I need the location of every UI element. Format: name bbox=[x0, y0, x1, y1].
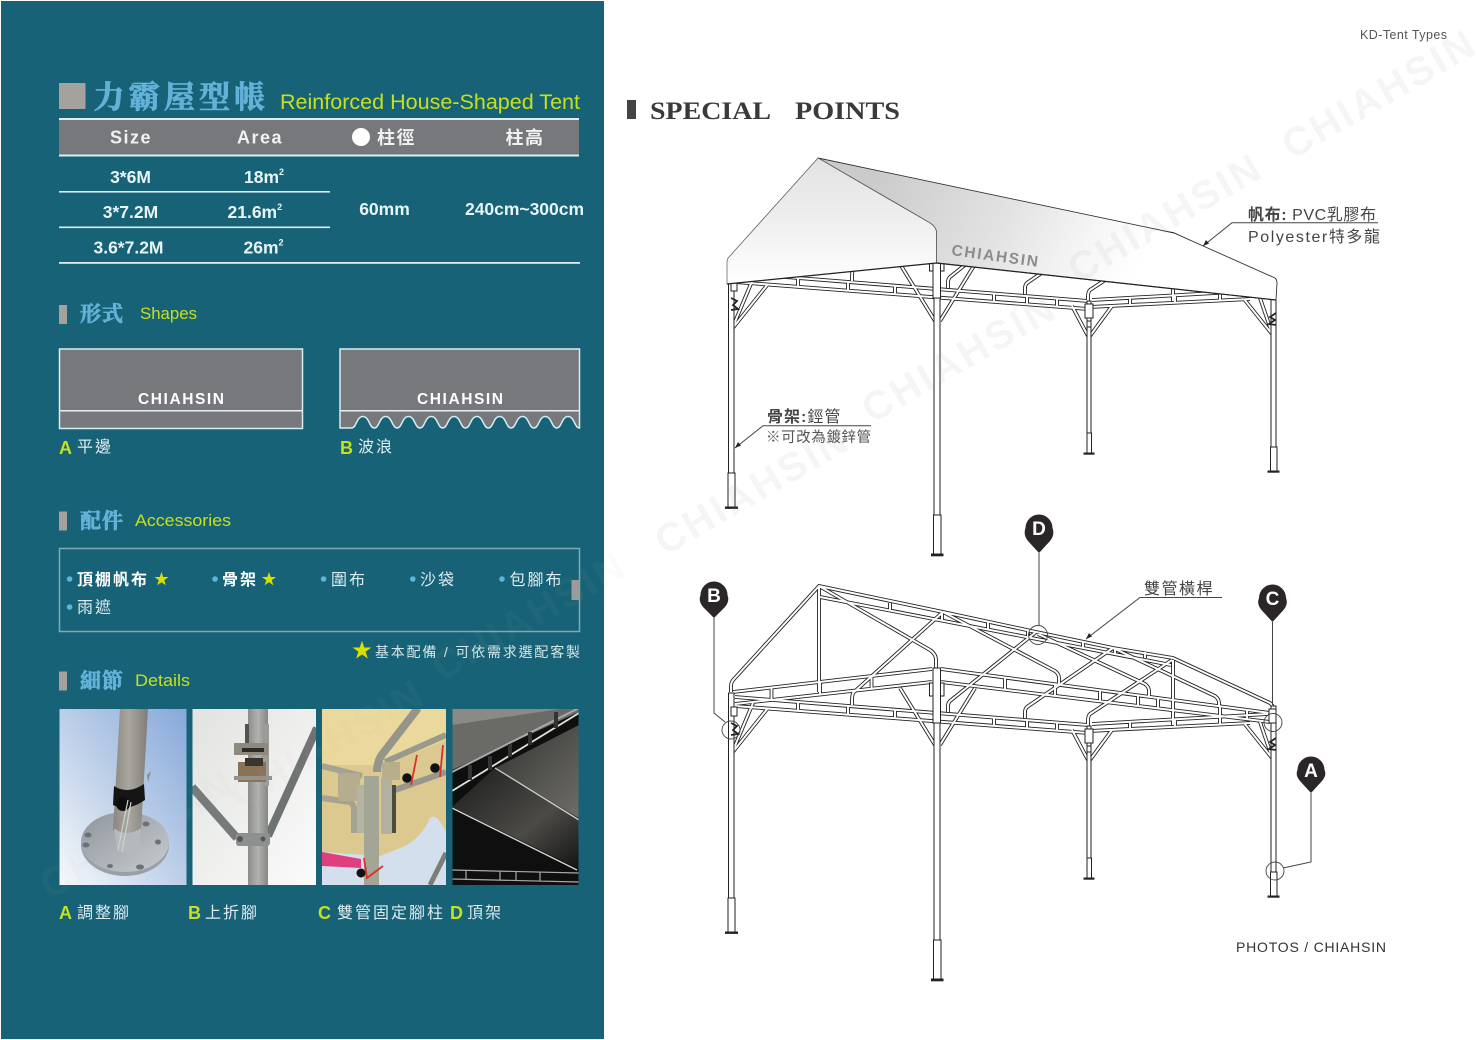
callout: canvas material bbox=[1203, 205, 1381, 246]
accessories list box: ★ bbox=[154, 571, 169, 588]
callout: double tube crossbar: 雙管橫桿 bbox=[1144, 579, 1214, 598]
callout: canvas material: 帆布: PVC乳膠布 bbox=[1248, 205, 1377, 224]
accessories list box: 雨遮 bbox=[77, 598, 113, 616]
watermark: diagonal brand: CHIAHSIN bbox=[1060, 145, 1271, 292]
detail captions: C bbox=[318, 903, 331, 923]
detail captions: A bbox=[59, 903, 72, 923]
title: product name bbox=[59, 80, 580, 115]
page tag: KD-Tent Types bbox=[1360, 28, 1447, 42]
photo B: folding joint bbox=[192, 709, 316, 885]
detail captions: 調整腳 bbox=[77, 904, 131, 922]
heading: details bbox=[59, 669, 190, 693]
table: size specifications: 21.6m bbox=[228, 202, 277, 222]
callout: frame material: 骨架:鋞管 bbox=[767, 407, 841, 426]
callout: double tube crossbar bbox=[1086, 579, 1222, 639]
detail captions: 頂架 bbox=[467, 904, 503, 922]
table: size specifications bbox=[59, 118, 584, 264]
pin D bbox=[1025, 514, 1053, 644]
watermark: diagonal brand: CHIAHSIN bbox=[32, 761, 243, 908]
table: size specifications: Size bbox=[110, 128, 152, 148]
detail captions: B bbox=[188, 903, 201, 923]
table: size specifications: 3.6*7.2M bbox=[93, 238, 164, 258]
table: size specifications: 2 bbox=[277, 202, 282, 212]
shape B: wavy edge bbox=[340, 349, 580, 458]
accessories list box bbox=[60, 548, 580, 632]
heading: special points: SPECIAL bbox=[650, 98, 771, 125]
pin C bbox=[1258, 584, 1287, 732]
canvas: front gable bbox=[727, 158, 936, 284]
pin D: D bbox=[1032, 519, 1046, 540]
diagram: bare tent frame bbox=[726, 586, 1279, 981]
table: size specifications: 60mm bbox=[359, 199, 410, 219]
panel: teal product sheet bbox=[1, 1, 604, 1039]
photo A: adjustable foot bbox=[60, 709, 186, 885]
table: size specifications: 26m bbox=[244, 238, 279, 258]
pin C: C bbox=[1266, 589, 1280, 610]
table: size specifications: 2 bbox=[279, 167, 284, 177]
table: size specifications: Area bbox=[237, 128, 283, 148]
table: size specifications: 18m bbox=[244, 167, 279, 187]
heading: shapes: 形式 bbox=[80, 302, 124, 326]
pin A bbox=[1266, 756, 1325, 880]
pin A: A bbox=[1304, 761, 1318, 782]
accessories list box: ★ bbox=[262, 571, 277, 588]
watermark: diagonal brand: CHIAHSIN bbox=[222, 671, 433, 818]
accessories list box: 圍布 bbox=[331, 571, 367, 589]
heading: special points: POINTS bbox=[795, 98, 900, 125]
heading: accessories bbox=[59, 509, 231, 533]
accessories list box: 骨架 bbox=[222, 571, 258, 589]
photo credit: PHOTOS / CHIAHSIN bbox=[1236, 939, 1386, 955]
canvas: roof long side bbox=[818, 158, 1277, 300]
title: product name: 力霸屋型帳 bbox=[94, 80, 270, 115]
shape A: flat edge: CHIAHSIN bbox=[138, 391, 224, 408]
canvas: bottom hem line bbox=[727, 263, 1276, 300]
watermark: diagonal brand: CHIAHSIN bbox=[424, 543, 635, 690]
note: standard equipment: ★ bbox=[352, 640, 372, 662]
table: size specifications: 2 bbox=[279, 238, 284, 248]
table: size specifications: 3*7.2M bbox=[103, 202, 158, 222]
photo D: roof frame underside bbox=[452, 709, 578, 885]
detail captions: 雙管固定腳柱 bbox=[337, 903, 445, 922]
callout: frame material bbox=[735, 407, 871, 448]
canvas brand: CHIAHSIN bbox=[950, 242, 1039, 271]
table: size specifications: 3*6M bbox=[110, 167, 151, 187]
callout: canvas material: Polyester特多龍 bbox=[1248, 228, 1381, 246]
photo C: double tube post bbox=[322, 709, 446, 885]
shape A: flat edge: 平邊 bbox=[77, 438, 113, 456]
title: product name: Reinforced House-Shaped Tent bbox=[280, 91, 580, 114]
accessories list box: 包腳布 bbox=[510, 571, 564, 589]
heading: accessories: 配件 bbox=[80, 509, 124, 533]
table: size specifications: 240cm~300cm bbox=[465, 199, 584, 219]
pin B bbox=[700, 582, 740, 739]
accessories list box: 沙袋 bbox=[420, 571, 456, 589]
note: standard equipment: 基本配備 / 可依需求選配客製 bbox=[375, 644, 580, 660]
heading: details: 細節 bbox=[80, 669, 124, 693]
shape B: wavy edge: B bbox=[340, 438, 353, 458]
diagram: tent with canvas bbox=[726, 158, 1279, 556]
heading: special points bbox=[627, 98, 900, 125]
heading: details: Details bbox=[135, 671, 190, 690]
heading: accessories: Accessories bbox=[135, 511, 231, 530]
watermark: diagonal brand: CHIAHSIN bbox=[854, 285, 1065, 432]
shape B: wavy edge: CHIAHSIN bbox=[417, 391, 503, 408]
accessories list box: 頂棚帆布 bbox=[77, 570, 149, 589]
pin B: B bbox=[707, 586, 721, 607]
table: size specifications: 柱徑 bbox=[377, 128, 416, 148]
shape A: flat edge: A bbox=[59, 438, 72, 458]
shape A: flat edge bbox=[59, 349, 302, 458]
heading: shapes bbox=[59, 302, 197, 326]
detail captions bbox=[59, 903, 503, 923]
detail captions: 上折腳 bbox=[205, 904, 259, 922]
shape B: wavy edge: 波浪 bbox=[358, 438, 394, 456]
watermark: diagonal brand: CHIAHSIN bbox=[648, 417, 858, 564]
callout: frame material: ※可改為鍍鋅管 bbox=[766, 428, 871, 446]
detail captions: D bbox=[450, 903, 463, 923]
heading: shapes: Shapes bbox=[140, 304, 197, 323]
table: size specifications: 柱高 bbox=[506, 127, 544, 148]
note: standard equipment bbox=[352, 640, 580, 662]
